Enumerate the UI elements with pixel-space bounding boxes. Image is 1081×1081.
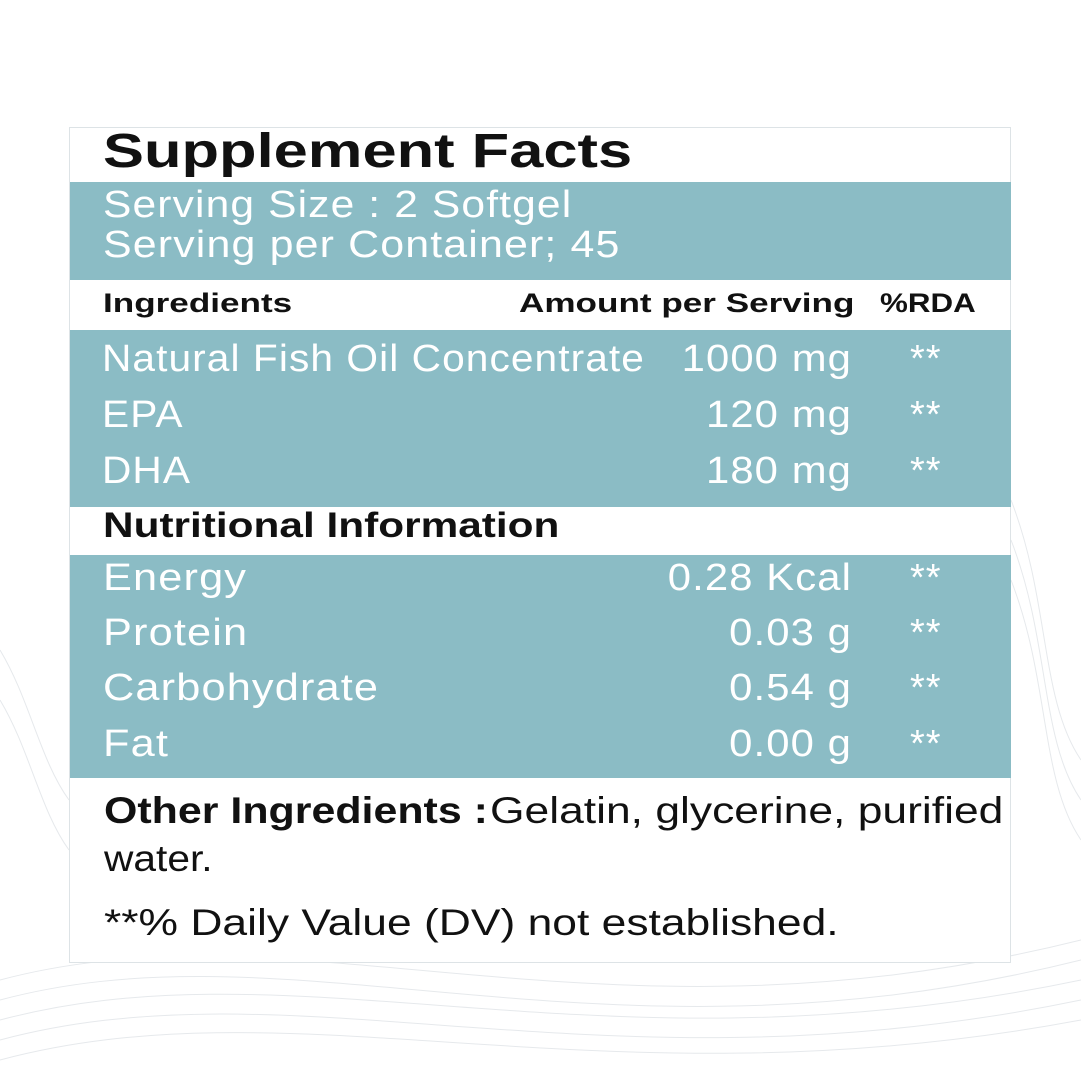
nutrition block: ** (910, 612, 942, 654)
ingredients block: 1000 mg (682, 338, 852, 380)
table header: Amount per Serving (519, 288, 854, 318)
nutritional heading: Nutritional Information (103, 506, 559, 545)
table header (103, 288, 976, 318)
ingredients block: 180 mg (706, 450, 852, 492)
nutrition block: Protein (103, 612, 248, 654)
panel (69, 127, 1011, 963)
ingredients block: DHA (102, 450, 191, 492)
nutrition block: ** (910, 667, 942, 709)
ingredients block: Natural Fish Oil Concentrate (102, 338, 645, 380)
other ingredients: water. (104, 838, 213, 879)
nutrition block: 0.03 g (729, 612, 852, 654)
ingredients block (70, 330, 1011, 507)
table header: %RDA (880, 288, 976, 318)
serving band: Serving Size : 2 Softgel (103, 184, 572, 226)
ingredients block: ** (910, 338, 942, 380)
ingredients block: ** (910, 450, 942, 492)
nutrition block: ** (910, 557, 942, 599)
other ingredients: Gelatin, glycerine, purified (490, 790, 1003, 831)
nutrition block: 0.28 Kcal (668, 557, 852, 599)
nutrition block: Carbohydrate (103, 667, 379, 709)
nutrition block: 0.54 g (729, 667, 852, 709)
ingredients block: ** (910, 394, 942, 436)
serving band (70, 182, 1011, 280)
title: Supplement Facts (103, 125, 632, 178)
footnote: **% Daily Value (DV) not established. (104, 902, 839, 943)
ingredients block: EPA (102, 394, 184, 436)
nutrition block: Fat (103, 723, 169, 765)
nutrition block: 0.00 g (729, 723, 852, 765)
other ingredients (104, 790, 1003, 879)
serving band: Serving per Container; 45 (103, 224, 621, 266)
nutrition block: Energy (103, 557, 247, 599)
nutrition block: ** (910, 723, 942, 765)
other ingredients: Other Ingredients : (104, 790, 488, 831)
ingredients block: 120 mg (706, 394, 852, 436)
table header: Ingredients (103, 288, 292, 318)
nutrition block (70, 555, 1011, 778)
